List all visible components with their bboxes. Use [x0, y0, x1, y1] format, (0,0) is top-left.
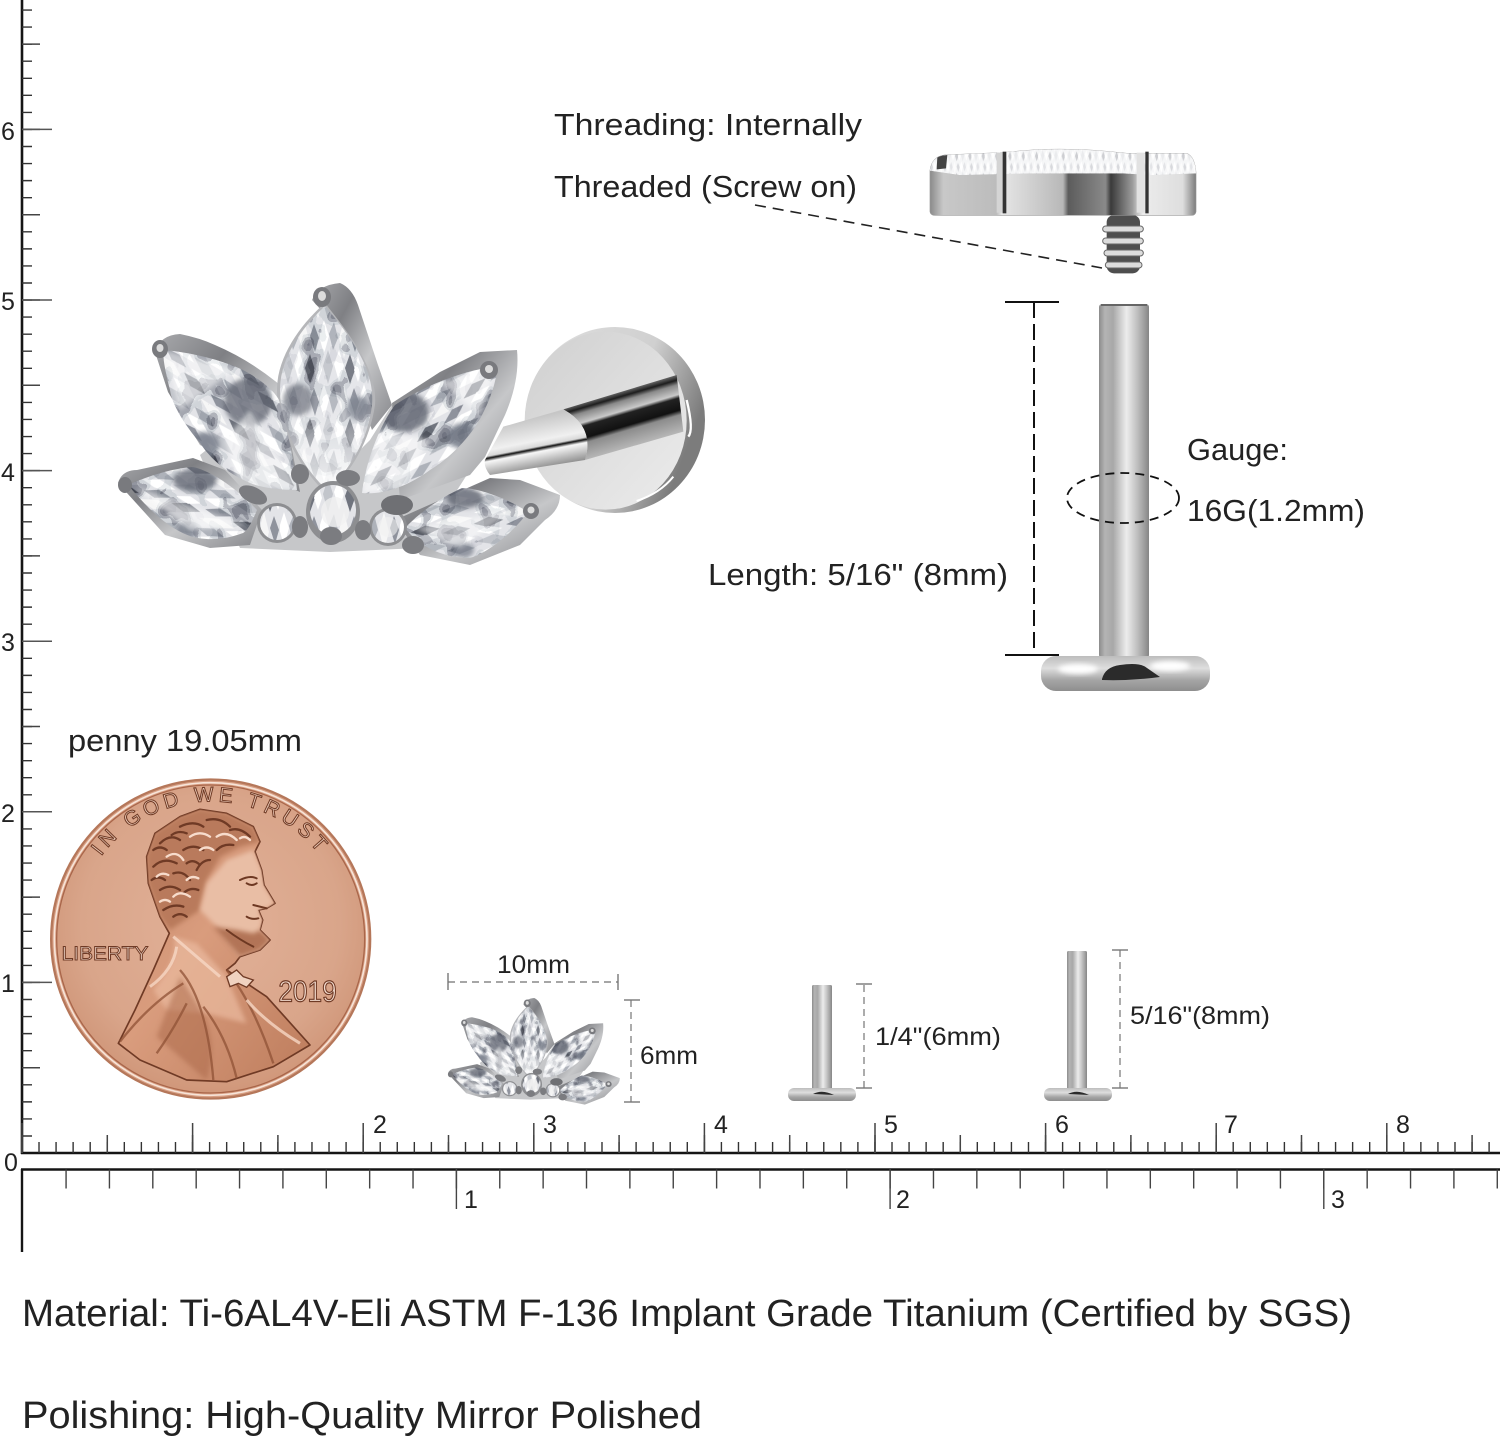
vertical centimetre ruler: 4 [1, 459, 15, 487]
flat-back post [1041, 304, 1210, 691]
horizontal centimetre ruler: 5 [884, 1111, 898, 1139]
vertical centimetre ruler: 6 [1, 118, 15, 146]
6mm post [788, 985, 856, 1101]
backing disc and shaft [485, 327, 705, 513]
inscription: LIBERTY: LIBERTY [62, 944, 148, 965]
penny label: penny 19.05mm [68, 723, 302, 758]
horizontal centimetre ruler: 7 [1224, 1111, 1238, 1139]
vertical centimetre ruler: 2 [1, 800, 15, 828]
post [1099, 304, 1149, 658]
inch ruler: 1 [464, 1186, 478, 1214]
8mm post bracket: 5/16"(8mm) [1130, 1002, 1270, 1030]
penny for scale [50, 778, 372, 1100]
inch ruler: 2 [896, 1186, 910, 1214]
threading label: Threading: Internally [554, 107, 863, 142]
vertical centimetre ruler: 1 [1, 970, 15, 998]
length label: Length: 5/16" (8mm) [708, 557, 1008, 592]
horizontal centimetre ruler: 3 [543, 1111, 557, 1139]
6mm height bracket: 6mm [640, 1042, 698, 1070]
threaded pin [1103, 215, 1143, 273]
horizontal centimetre ruler: 4 [714, 1111, 728, 1139]
horizontal centimetre ruler: 2 [373, 1111, 387, 1139]
horizontal centimetre ruler: 8 [1396, 1111, 1410, 1139]
crystal tops [930, 149, 1196, 175]
10mm width bracket: 10mm [497, 951, 570, 979]
threading label: Threaded (Screw on) [554, 169, 857, 204]
inscription: IN GOD WE TRUST: IN GOD WE TRUST [90, 786, 329, 856]
vertical centimetre ruler [1, 0, 37, 1177]
lotus head with marquise crystals [39, 229, 614, 658]
flat base [1041, 656, 1210, 691]
small lotus head, 10mm by 6mm [417, 978, 641, 1140]
horizontal centimetre ruler: 6 [1055, 1111, 1069, 1139]
6mm post bracket: 1/4"(6mm) [875, 1023, 1001, 1051]
8mm post [1044, 951, 1112, 1101]
length bracket [1005, 302, 1059, 655]
material line: Material: Ti-6AL4V-Eli ASTM F-136 Implant Grade Titanium (Certified by SGS) [22, 1293, 1352, 1335]
6mm height bracket [624, 1000, 698, 1102]
horizontal centimetre ruler [21, 1111, 1500, 1153]
screw-on head, side view [929, 146, 1197, 273]
polishing line: Polishing: High-Quality Mirror Polished [22, 1395, 702, 1437]
inscription: 2019: 2019 [278, 976, 337, 1009]
gauge label: 16G(1.2mm) [1187, 493, 1365, 528]
vertical centimetre ruler: 0 [4, 1149, 18, 1177]
inch ruler: 3 [1331, 1186, 1345, 1214]
head body [930, 149, 1196, 215]
threading label [554, 107, 863, 204]
threading leader line [755, 205, 1102, 268]
inch ruler [21, 1169, 1500, 1252]
product photo: lotus labret with backing disc [39, 229, 705, 658]
gauge label: Gauge: [1187, 432, 1288, 467]
gauge label [1187, 432, 1365, 528]
vertical centimetre ruler: 5 [1, 288, 15, 316]
head prong lines [997, 152, 1149, 213]
vertical centimetre ruler: 3 [1, 629, 15, 657]
coin body [50, 778, 371, 1100]
Lincoln bust [118, 809, 310, 1082]
gauge dashed ellipse [1067, 473, 1179, 523]
